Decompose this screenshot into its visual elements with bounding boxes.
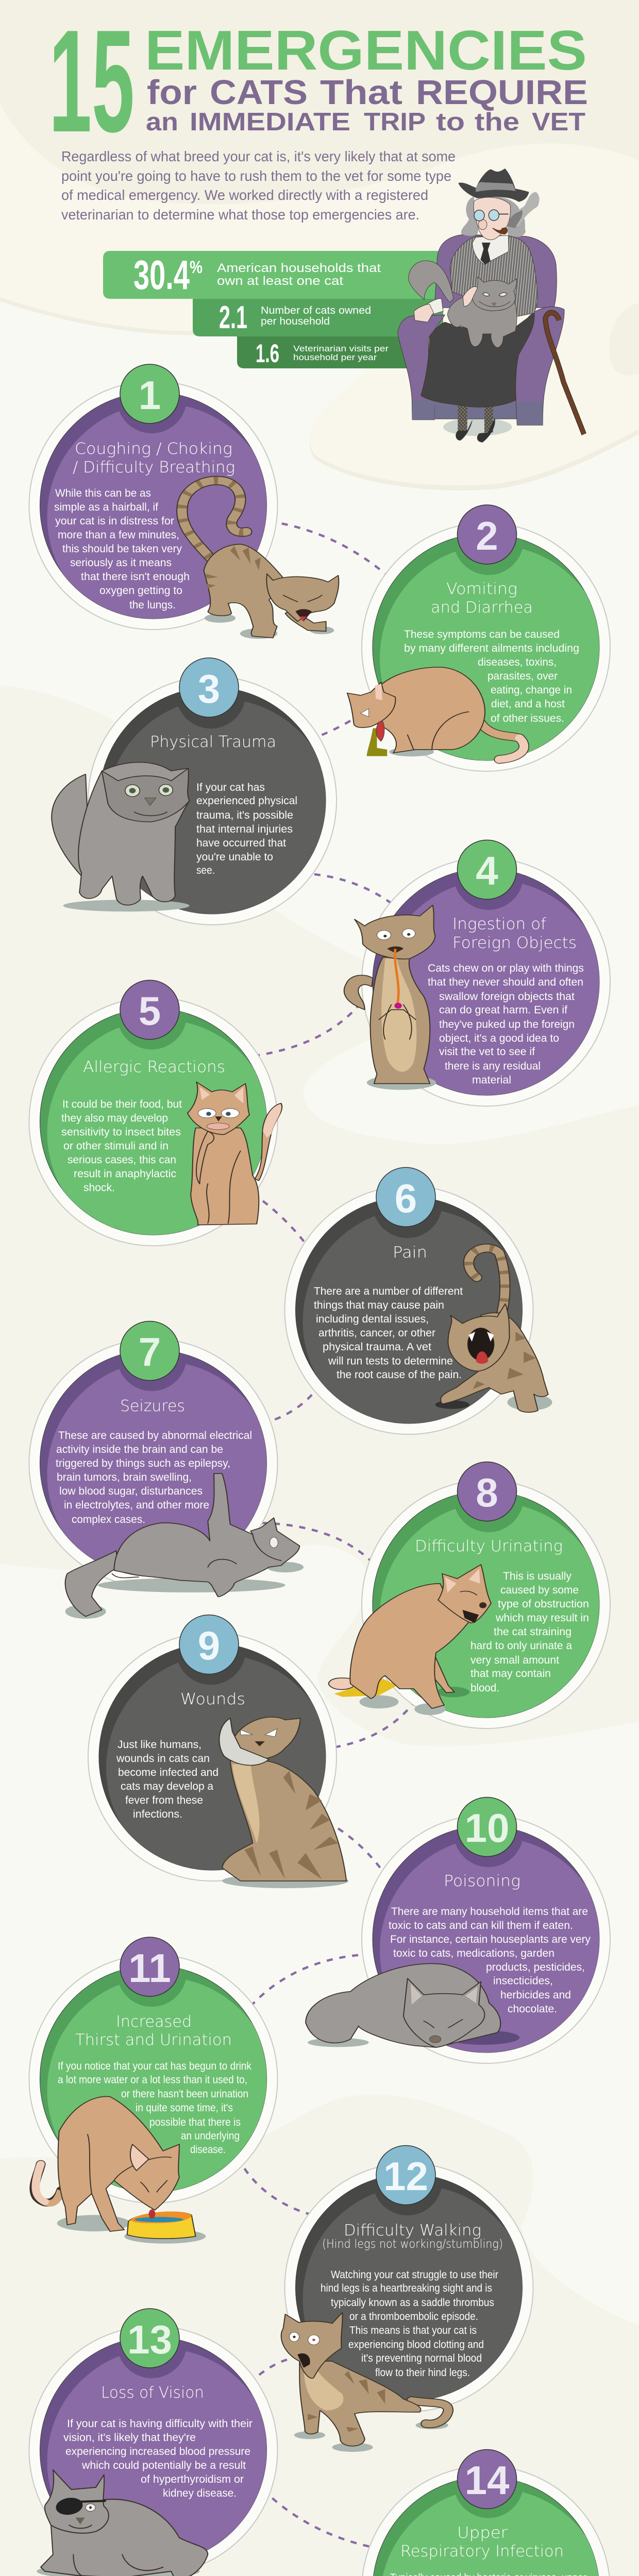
body 10: toxic to cats, medications, garden bbox=[393, 1947, 554, 1959]
body 4: Cats chew on or play with things bbox=[428, 962, 584, 974]
body 2: diseases, toxins, bbox=[478, 656, 557, 668]
body 12 bbox=[321, 2269, 498, 2379]
badge 10: 10 bbox=[465, 1805, 509, 1851]
title: VET bbox=[532, 108, 585, 136]
panel 10: poisoning bbox=[306, 1797, 610, 2064]
title: REQUIRE bbox=[416, 73, 588, 112]
body 11: a lot more water or a lot less than it used to, bbox=[58, 2074, 247, 2086]
body 7: low blood sugar, disturbances bbox=[59, 1485, 203, 1497]
badge 14: 14 bbox=[465, 2458, 509, 2503]
heading 12: Difficulty Walking bbox=[344, 2222, 481, 2240]
title: for bbox=[147, 73, 197, 112]
panel 8: difficulty urinating bbox=[328, 1462, 610, 1729]
badge 2 bbox=[458, 505, 516, 564]
badge 1 bbox=[120, 364, 179, 423]
badge 10 bbox=[458, 1797, 516, 1857]
heading 4: Ingestion of bbox=[452, 915, 546, 934]
heading 11: Thirst and Urination bbox=[75, 2031, 232, 2049]
dashed connector 9 to 10 bbox=[338, 1828, 385, 1874]
body 1: While this can be as bbox=[55, 487, 151, 499]
body 6: will run tests to determine bbox=[328, 1355, 453, 1367]
body 9: wounds in cats can bbox=[116, 1753, 210, 1765]
body 1 bbox=[54, 487, 190, 611]
heading 4 bbox=[452, 915, 577, 952]
stat: 2.1 bbox=[193, 299, 443, 336]
badge 13 bbox=[120, 2309, 179, 2368]
cat 12: stumbling tabby bbox=[281, 2313, 448, 2452]
panel 13: loss of vision bbox=[29, 2308, 277, 2576]
heading 4: Foreign Objects bbox=[452, 934, 577, 952]
body 10: herbicides and bbox=[500, 1989, 571, 2001]
body 3: experienced physical bbox=[196, 795, 297, 807]
body 6: the root cause of the pain. bbox=[337, 1369, 462, 1381]
heading 2 bbox=[431, 580, 533, 617]
badge 1: 1 bbox=[139, 372, 161, 418]
body 1: oxygen getting to bbox=[99, 585, 182, 597]
heading 1 bbox=[73, 440, 235, 477]
stat: 1.6: Veterinarian visits per bbox=[293, 344, 389, 353]
badge 14 bbox=[458, 2449, 516, 2509]
body 6: things that may cause pain bbox=[314, 1299, 444, 1311]
badge 7: 7 bbox=[139, 1329, 161, 1375]
body 4: they've puked up the foreign bbox=[439, 1019, 575, 1030]
body 4: there is any residual bbox=[445, 1060, 541, 1072]
body 2: diet, and a host bbox=[491, 698, 565, 710]
body 10: There are many household items that are bbox=[391, 1906, 588, 1918]
panel 5: allergic reactions bbox=[29, 979, 282, 1246]
body 12: Watching your cat struggle to use their bbox=[331, 2269, 498, 2281]
cat 4: tabby with string in mouth bbox=[344, 905, 436, 1090]
dashed connector 13 to 14 bbox=[263, 2489, 377, 2548]
body 9: become infected and bbox=[118, 1767, 218, 1778]
cat 5: orange cat with swollen lips bbox=[188, 1082, 282, 1225]
title: an bbox=[146, 108, 178, 136]
heading 11: Increased bbox=[116, 2013, 192, 2031]
body 1: this should be taken very bbox=[62, 543, 182, 555]
body 11: or there hasn't been urination bbox=[121, 2088, 248, 2100]
stat: 2.1: per household bbox=[261, 316, 330, 327]
dashed connector 1 to 2 bbox=[269, 521, 389, 577]
body 7: complex cases. bbox=[72, 1514, 145, 1526]
body 2: parasites, over bbox=[487, 670, 558, 682]
body 3: that internal injuries bbox=[196, 823, 293, 835]
body 9: Just like humans, bbox=[117, 1739, 201, 1751]
stat: 2.1: 2.1 bbox=[219, 300, 247, 335]
body 7: brain tumors, brain swelling, bbox=[57, 1471, 192, 1483]
cat 1: coughing tabby bbox=[182, 481, 339, 639]
title: TRIP bbox=[364, 108, 426, 136]
body 10: products, pesticides, bbox=[486, 1961, 585, 1973]
body 1: more than a few minutes, bbox=[58, 529, 179, 541]
body 3: If your cat has bbox=[196, 782, 265, 793]
intro paragraph: of medical emergency. We worked directly with a registered bbox=[61, 187, 428, 203]
body 3: you're unable to bbox=[196, 851, 273, 863]
body 11: disease. bbox=[190, 2144, 226, 2156]
body 5: result in anaphylactic bbox=[74, 1168, 176, 1180]
body 11: an underlying bbox=[181, 2130, 240, 2142]
cat 9: bandaged tabby bbox=[219, 1717, 348, 1888]
body 1: the lungs. bbox=[129, 599, 176, 611]
cat 8: straining orange cat bbox=[328, 1565, 491, 1715]
body 10: For instance, certain houseplants are very bbox=[390, 1934, 591, 1945]
title: the bbox=[475, 108, 519, 136]
body 13: If your cat is having difficulty with their bbox=[67, 2418, 253, 2430]
panel 4: ingestion of foreign objects bbox=[344, 840, 610, 1107]
heading 7: Seizures bbox=[120, 1397, 185, 1415]
body 2 bbox=[404, 629, 579, 724]
dashed connector 7 to 8 bbox=[261, 1523, 373, 1563]
body 4: that they never should and often bbox=[428, 976, 583, 988]
cat 2: vomiting orange cat bbox=[347, 667, 524, 759]
title: EMERGENCIES bbox=[145, 19, 587, 82]
body 7: These are caused by abnormal electrical bbox=[58, 1430, 252, 1442]
panel 6: pain bbox=[284, 1167, 552, 1435]
dashed connector 4 to 5 bbox=[253, 1003, 361, 1056]
body 4: can do great harm. Even if bbox=[439, 1004, 567, 1016]
stat: 30.4% bbox=[103, 251, 443, 299]
dashed connector 2 to 3 bbox=[314, 721, 350, 738]
body 9: cats may develop a bbox=[121, 1781, 213, 1792]
dashed connector 11 to 12 bbox=[238, 2158, 316, 2216]
statistics bars bbox=[103, 251, 443, 368]
badge 5: 5 bbox=[139, 988, 161, 1033]
body 1: your cat is in distress for bbox=[55, 515, 174, 527]
title bbox=[49, 0, 588, 162]
body 8: This is usually bbox=[503, 1570, 571, 1582]
body 2: by many different ailments including bbox=[404, 642, 579, 654]
body 1: that there isn't enough bbox=[81, 571, 190, 583]
body 13 bbox=[63, 2418, 253, 2499]
heading 2: Vomiting bbox=[446, 580, 517, 598]
badge 9: 9 bbox=[198, 1623, 220, 1668]
dashed connector 8 to 9 bbox=[332, 1700, 416, 1748]
title: CATS bbox=[210, 73, 308, 112]
stat: 30.4%: 30.4 bbox=[133, 252, 190, 298]
body 3: trauma, it's possible bbox=[196, 809, 293, 821]
body 10 bbox=[389, 1906, 591, 2015]
stat: 1.6: household per year bbox=[293, 352, 377, 362]
body 5: sensitivity to insect bites bbox=[61, 1126, 181, 1138]
cat 11: drinking orange cat with bowl bbox=[35, 2096, 206, 2244]
body 3 bbox=[196, 782, 297, 876]
body 4: material bbox=[472, 1074, 511, 1086]
body 13: kidney disease. bbox=[163, 2487, 237, 2499]
heading 5: Allergic Reactions bbox=[83, 1058, 225, 1076]
body 5 bbox=[61, 1098, 182, 1194]
badge 12 bbox=[376, 2145, 435, 2205]
badge 2: 2 bbox=[476, 513, 498, 558]
body 7 bbox=[56, 1430, 252, 1526]
badge 12: 12 bbox=[383, 2154, 428, 2199]
body 6: There are a number of different bbox=[314, 1285, 463, 1297]
body 12: typically known as a saddle thrombus bbox=[331, 2297, 494, 2309]
body 5: It could be their food, but bbox=[62, 1098, 182, 1110]
stat: 2.1: Number of cats owned bbox=[261, 305, 371, 316]
body 9: fever from these bbox=[125, 1794, 203, 1806]
body 12: This means is that your cat is bbox=[349, 2325, 477, 2336]
body 13: vision, it's likely that they're bbox=[63, 2432, 196, 2444]
heading 11 bbox=[75, 2013, 232, 2049]
badge 7 bbox=[120, 1321, 179, 1381]
body 6: physical trauma. A vet bbox=[323, 1341, 431, 1353]
body 10: insecticides, bbox=[493, 1975, 553, 1987]
badge 4 bbox=[458, 840, 516, 900]
body 8: hard to only urinate a bbox=[470, 1640, 572, 1652]
body 5: shock. bbox=[83, 1182, 115, 1194]
badge 9 bbox=[179, 1615, 239, 1674]
title: 15 bbox=[49, 0, 134, 162]
body 12: it's preventing normal blood bbox=[361, 2352, 482, 2364]
body 11 bbox=[58, 2060, 251, 2156]
body 1: seriously as it means bbox=[70, 557, 172, 569]
badge 6: 6 bbox=[395, 1176, 417, 1221]
body 6: including dental issues, bbox=[316, 1313, 429, 1325]
heading 2: and Diarrhea bbox=[431, 599, 533, 617]
stat: 30.4%: % bbox=[190, 258, 203, 277]
body 11: If you notice that your cat has begun to drink bbox=[58, 2060, 251, 2072]
body 11: possible that there is bbox=[149, 2116, 241, 2128]
badge 3: 3 bbox=[198, 666, 220, 711]
intro paragraph: point you're going to have to rush them to the vet for some type bbox=[61, 168, 451, 184]
body 2: These symptoms can be caused bbox=[404, 629, 560, 640]
body 13: which could potentially be a result bbox=[81, 2460, 246, 2471]
badge 11 bbox=[120, 1937, 179, 1996]
heading 1: Coughing / Choking bbox=[75, 440, 232, 458]
heading 9: Wounds bbox=[180, 1690, 245, 1708]
body 4: object, it's a good idea to bbox=[439, 1032, 559, 1044]
body 4: swallow foreign objects that bbox=[439, 991, 575, 1003]
body 4 bbox=[428, 962, 584, 1086]
heading 10: Poisoning bbox=[444, 1872, 520, 1890]
body 12: or a thromboembolic episode. bbox=[349, 2311, 478, 2323]
panel 1: coughing bbox=[29, 363, 339, 639]
dashed connector 3 to 4 bbox=[301, 873, 395, 906]
body 1: simple as a hairball, if bbox=[54, 501, 158, 513]
heading 14: Respiratory Infection bbox=[400, 2543, 564, 2561]
body 3: have occurred that bbox=[196, 837, 286, 849]
intro paragraph: veterinarian to determine what those top emergencies are. bbox=[61, 207, 419, 223]
heading 13: Loss of Vision bbox=[101, 2384, 204, 2402]
body 13: of hyperthyroidism or bbox=[141, 2473, 244, 2485]
panel 12: difficulty walking bbox=[281, 2145, 533, 2452]
title: to bbox=[436, 108, 465, 136]
stat: 30.4%: own at least one cat bbox=[217, 274, 343, 288]
dashed connector 5 to 6 bbox=[263, 1201, 308, 1246]
title: IMMEDIATE bbox=[190, 108, 350, 136]
body 9: infections. bbox=[133, 1808, 182, 1820]
body 6 bbox=[314, 1285, 463, 1381]
badge 4: 4 bbox=[476, 848, 498, 893]
panel 2: vomiting bbox=[347, 505, 610, 772]
body 8: very small amount bbox=[470, 1654, 559, 1666]
badge 6 bbox=[376, 1167, 435, 1227]
body 5: they also may develop bbox=[61, 1112, 168, 1124]
badge 11: 11 bbox=[128, 1945, 171, 1991]
badge 5 bbox=[120, 980, 179, 1040]
panel 7: seizures bbox=[29, 1321, 304, 1619]
panel 11: increased thirst and urination bbox=[29, 1937, 277, 2244]
badge 8: 8 bbox=[476, 1470, 498, 1515]
badge 13: 13 bbox=[127, 2317, 172, 2362]
heading 3: Physical Trauma bbox=[150, 733, 276, 751]
cat 10: sleeping gray cat bbox=[306, 1963, 519, 2047]
panel 14: upper respiratory infection bbox=[362, 2448, 610, 2576]
body 5: or other stimuli and in bbox=[63, 1140, 169, 1152]
dashed connector 6 to 7 bbox=[261, 1385, 320, 1424]
stat: 30.4%: American households that bbox=[217, 261, 381, 275]
heading 12 bbox=[322, 2222, 503, 2251]
cat 6: yowling tabby bbox=[435, 1248, 552, 1412]
title: That bbox=[320, 73, 402, 112]
body 8: that may contain bbox=[470, 1668, 551, 1680]
illustration: old lady with cat in purple armchair bbox=[398, 168, 584, 443]
body 11: in quite some time, it's bbox=[136, 2102, 233, 2114]
body 8: blood. bbox=[470, 1682, 499, 1694]
body 6: arthritis, cancer, or other bbox=[318, 1327, 435, 1339]
body 8: caused by some bbox=[500, 1584, 579, 1596]
badge 3 bbox=[179, 658, 239, 717]
body 9 bbox=[116, 1739, 218, 1820]
body 2: eating, change in bbox=[491, 684, 572, 696]
body 8 bbox=[470, 1570, 589, 1694]
heading 12: (Hind legs not working/stumbling) bbox=[322, 2238, 503, 2251]
dashed connector 10 to 11 bbox=[248, 1954, 371, 2009]
body 12: experiencing blood clotting and bbox=[348, 2339, 484, 2350]
body 3: see. bbox=[196, 865, 215, 876]
cat 7: gray cat having seizure bbox=[65, 1473, 304, 1619]
heading 14 bbox=[400, 2524, 564, 2561]
heading 8: Difficulty Urinating bbox=[415, 1537, 563, 1555]
body 5: serious cases, this can bbox=[68, 1154, 176, 1166]
body 2: of other issues. bbox=[491, 713, 564, 724]
badge 8 bbox=[458, 1462, 516, 1521]
cat 13: gray cat with eye patch bbox=[37, 2470, 208, 2576]
stat: 1.6: 1.6 bbox=[256, 339, 279, 368]
intro paragraph: Regardless of what breed your cat is, it's very likely that at some bbox=[61, 148, 456, 164]
stat: 1.6 bbox=[237, 336, 412, 368]
body 7: triggered by things such as epilepsy, bbox=[56, 1458, 230, 1469]
panel 3: physical trauma bbox=[52, 658, 337, 925]
body 7: in electrolytes, and other more bbox=[64, 1499, 209, 1511]
dashed connector 12 to 13 bbox=[253, 2360, 287, 2380]
heading 14: Upper bbox=[457, 2524, 508, 2542]
body 7: activity inside the brain and can be bbox=[56, 1444, 223, 1455]
heading 1: / Difficulty Breathing bbox=[73, 459, 235, 477]
panel 9: wounds bbox=[88, 1615, 348, 1888]
body 12: hind legs is a heartbreaking sight and is bbox=[321, 2282, 492, 2294]
intro paragraph bbox=[61, 148, 456, 223]
body 13: experiencing increased blood pressure bbox=[65, 2446, 250, 2458]
body 4: visit the vet to see if bbox=[439, 1046, 535, 1058]
heading 6: Pain bbox=[393, 1244, 427, 1262]
body 8: which may result in bbox=[495, 1612, 589, 1624]
body 12: flow to their hind legs. bbox=[375, 2367, 470, 2379]
body 10: chocolate. bbox=[508, 2003, 557, 2015]
cat 3: shocked gray cat bbox=[52, 762, 190, 911]
body 8: type of obstruction bbox=[498, 1598, 589, 1610]
body 10: toxic to cats and can kill them if eaten. bbox=[389, 1920, 573, 1931]
body 8: the cat straining bbox=[494, 1626, 571, 1638]
